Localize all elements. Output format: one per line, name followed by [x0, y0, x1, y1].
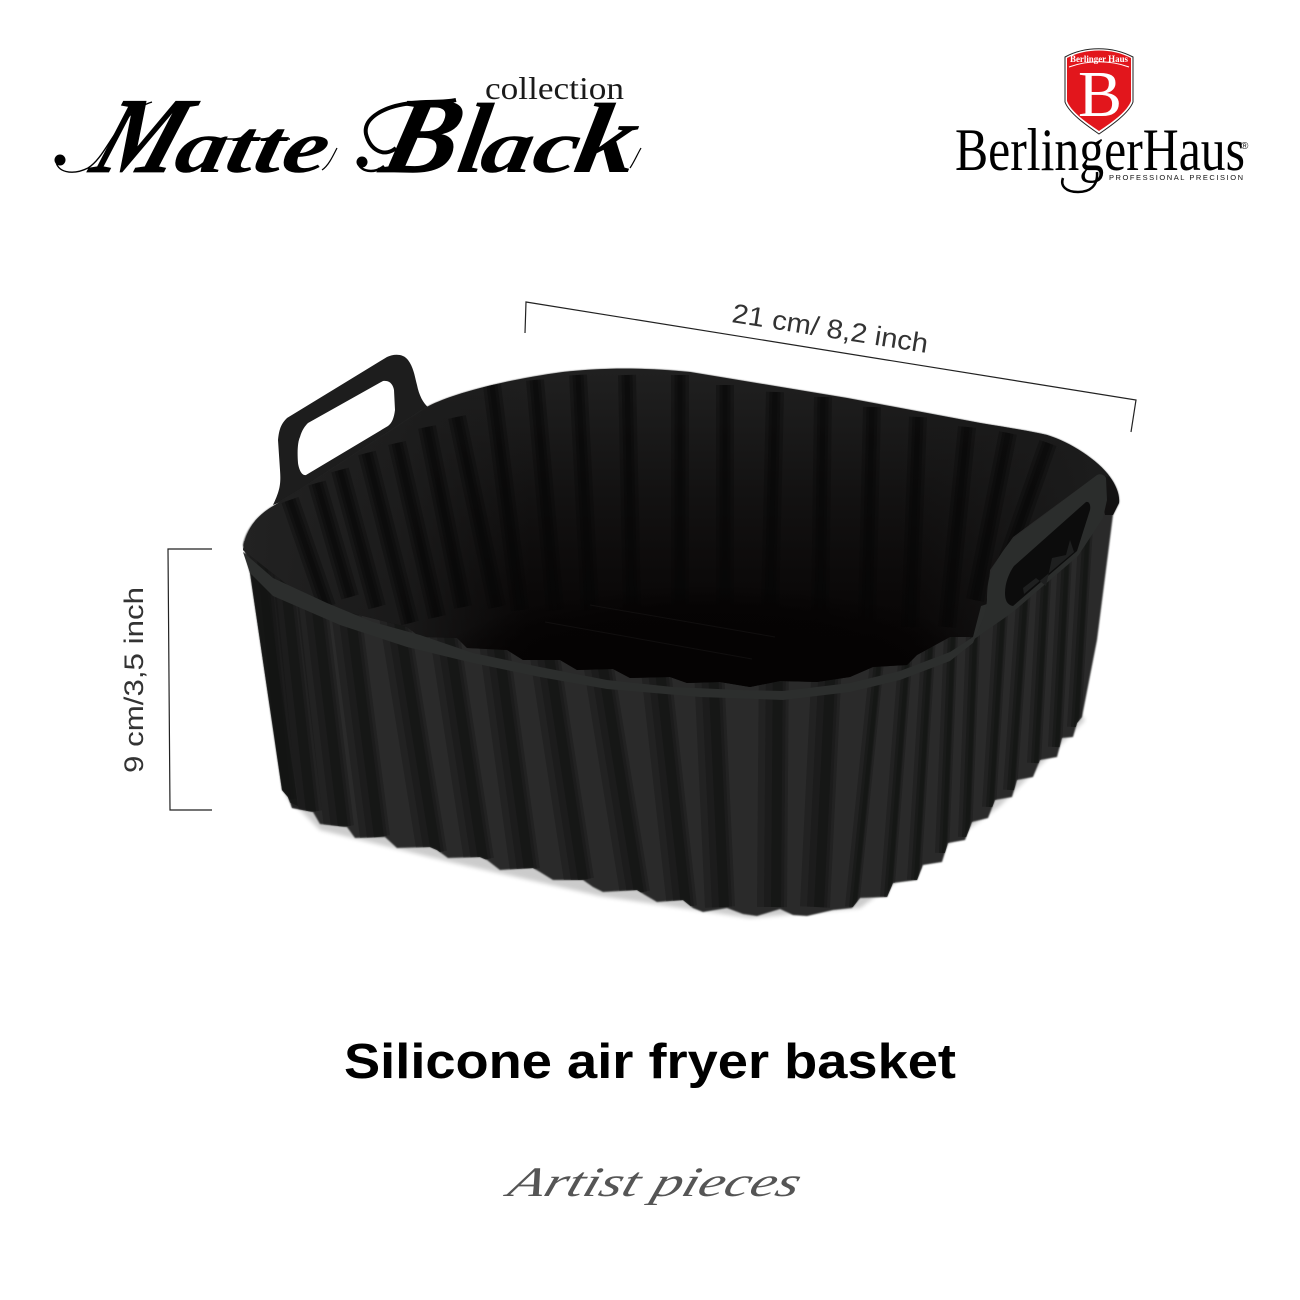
title: Matte Black: atte — [168, 105, 338, 189]
dimension: height — [119, 549, 212, 810]
tagline: Artist pieces: Artist pieces — [499, 1160, 808, 1206]
floor — [516, 656, 895, 687]
dimension: height: 9 cm/3,5 inch — [119, 587, 149, 773]
dimension: width — [525, 298, 1136, 432]
ground shadow — [285, 700, 1085, 918]
rim strip — [243, 552, 990, 700]
interior shading and ribs — [240, 375, 1120, 695]
logo: Berlinger Haus — [955, 49, 1249, 192]
product title: Silicone air fryer basket — [344, 1035, 956, 1089]
title: Matte Black: k — [568, 83, 648, 194]
outer wall ribs — [248, 510, 1089, 907]
teeth inside hole — [1023, 540, 1074, 594]
right inner wall light — [958, 418, 1110, 600]
outer wall — [243, 369, 1119, 916]
icon: red shield — [1065, 49, 1133, 134]
wordmark loop — [1062, 172, 1097, 192]
subtitle: collection: collection — [485, 70, 624, 106]
wordmark: BerlingerHaus — [955, 117, 1245, 183]
tagline: PROFESSIONAL PRECISION — [1109, 173, 1243, 182]
right handle — [973, 474, 1107, 640]
left inner wall light — [243, 387, 484, 642]
dimension: width: 21 cm/ 8,2 inch — [730, 298, 930, 359]
left edge shade — [248, 565, 298, 806]
interior — [243, 369, 1119, 687]
icon: red shield: B — [1078, 58, 1122, 131]
title swashes — [54, 100, 641, 172]
product: silicone basket — [240, 355, 1120, 918]
left handle — [273, 355, 428, 505]
handle hole — [1005, 502, 1090, 606]
title: Matte Black: l — [451, 83, 499, 194]
registered mark: ® — [1241, 141, 1249, 152]
floor grooves — [545, 605, 775, 659]
title: Matte Black: ac — [475, 105, 588, 189]
icon: red shield: Berlinger Haus — [1070, 54, 1128, 64]
heading: Matte Black collection — [54, 70, 648, 196]
title: Matte Black: B — [370, 75, 476, 196]
title: Matte Black — [77, 75, 648, 196]
title: Matte Black: M — [77, 77, 210, 196]
